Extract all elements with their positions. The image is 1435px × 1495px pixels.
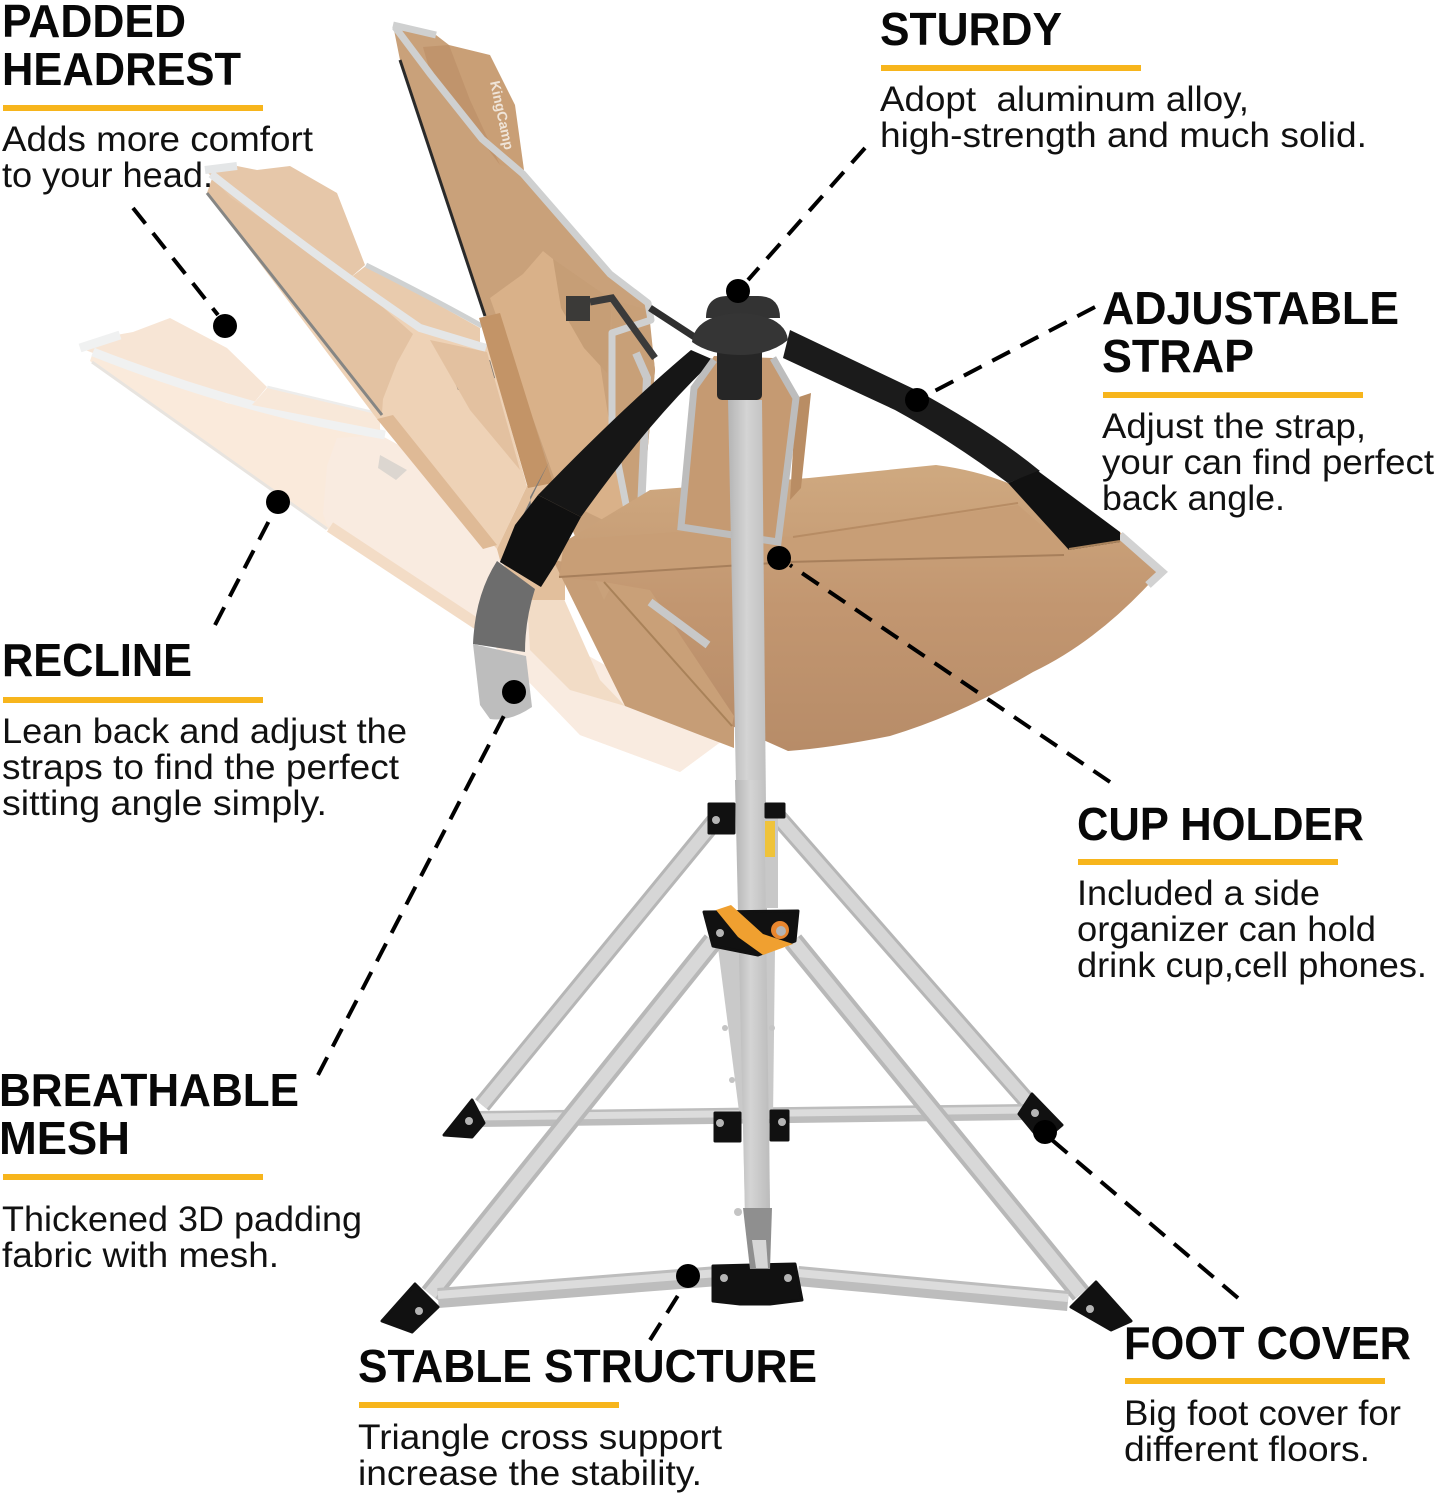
main seat back: KingCamp [487, 79, 517, 151]
callout: cup holder: organizer can hold [1077, 910, 1376, 949]
lower back under the arm [553, 560, 734, 748]
callout: padded headrest: Adds more comfort [2, 120, 313, 159]
back buckle patch [566, 296, 590, 321]
callout: breathable mesh: Thickened 3D padding [2, 1200, 362, 1239]
callout: adjustable strap: Adjust the strap, [1102, 407, 1366, 446]
tripod stand [382, 780, 1131, 1332]
front crossbars [438, 1273, 1068, 1301]
callout: adjustable strap: your can find perfect [1102, 443, 1434, 482]
light gray arm end [473, 644, 532, 720]
callout: stable structure: increase the stability. [358, 1454, 702, 1493]
black joints [382, 804, 1131, 1332]
orange strap [716, 905, 793, 955]
callout: stable structure [358, 1340, 817, 1493]
callout: adjustable strap: STRAP [1102, 330, 1254, 382]
callout: padded headrest: to your head. [2, 156, 213, 195]
callout: sturdy [880, 3, 1367, 155]
cup holder [681, 356, 811, 542]
left black strap [473, 350, 714, 720]
callout: stable structure: Triangle cross support [358, 1418, 722, 1457]
callout: recline: RECLINE [2, 634, 192, 686]
callout: adjustable strap: ADJUSTABLE [1102, 282, 1399, 334]
upper legs [482, 817, 1027, 1105]
callout: recline: straps to find the perfect [2, 748, 399, 787]
callout: foot cover: FOOT COVER [1124, 1317, 1411, 1369]
pole caps [692, 296, 788, 400]
center taper tube [718, 948, 775, 1119]
pole over stand [735, 780, 770, 1215]
right black strap [783, 330, 1120, 550]
callout: cup holder: Included a side [1077, 874, 1320, 913]
callout: cup holder: drink cup,cell phones. [1077, 946, 1427, 985]
rear crossbar [477, 1110, 1027, 1119]
callout: foot cover: Big foot cover for [1124, 1394, 1401, 1433]
hinge [743, 1208, 772, 1269]
callout: sturdy: high-strength and much solid. [880, 116, 1367, 155]
lower legs [430, 941, 1081, 1294]
callout: breathable mesh: MESH [0, 1112, 130, 1164]
middle reclined ghost chair [205, 166, 565, 600]
callout: recline: sitting angle simply. [2, 784, 327, 823]
leader lines and dots [133, 148, 1238, 1340]
callout: stable structure: STABLE STRUCTURE [358, 1340, 817, 1392]
callout: breathable mesh: fabric with mesh. [2, 1236, 279, 1275]
callout: sturdy: Adopt aluminum alloy, [880, 80, 1249, 119]
callout: cup holder [1077, 798, 1427, 985]
callout: padded headrest [2, 0, 313, 195]
callout: adjustable strap: back angle. [1102, 479, 1285, 518]
lightest reclined ghost chair [80, 318, 730, 772]
thin rear strap [650, 308, 696, 338]
chair illustration [80, 25, 1162, 1215]
second tube with yellow label [764, 808, 778, 908]
callout: breathable mesh [0, 1064, 362, 1275]
gray arm sleeve [473, 561, 535, 652]
callout: recline [2, 634, 407, 823]
main seat back [393, 25, 655, 600]
middle headrest [205, 166, 365, 278]
callout: sturdy: STURDY [880, 3, 1062, 55]
back edge trim [393, 25, 651, 535]
main seat [559, 465, 1162, 751]
headrest [423, 45, 524, 170]
callout: breathable mesh: BREATHABLE [0, 1064, 299, 1116]
callout: padded headrest: HEADREST [2, 43, 241, 95]
bolts [415, 816, 1094, 1315]
callout: foot cover: different floors. [1124, 1430, 1370, 1469]
callout: recline: Lean back and adjust the [2, 712, 407, 751]
pole [728, 400, 770, 1215]
adjustment pins [722, 1025, 775, 1216]
callout: foot cover [1124, 1317, 1411, 1469]
lightest headrest [80, 318, 267, 405]
callout: adjustable strap [1102, 282, 1434, 518]
callout: cup holder: CUP HOLDER [1077, 798, 1364, 850]
